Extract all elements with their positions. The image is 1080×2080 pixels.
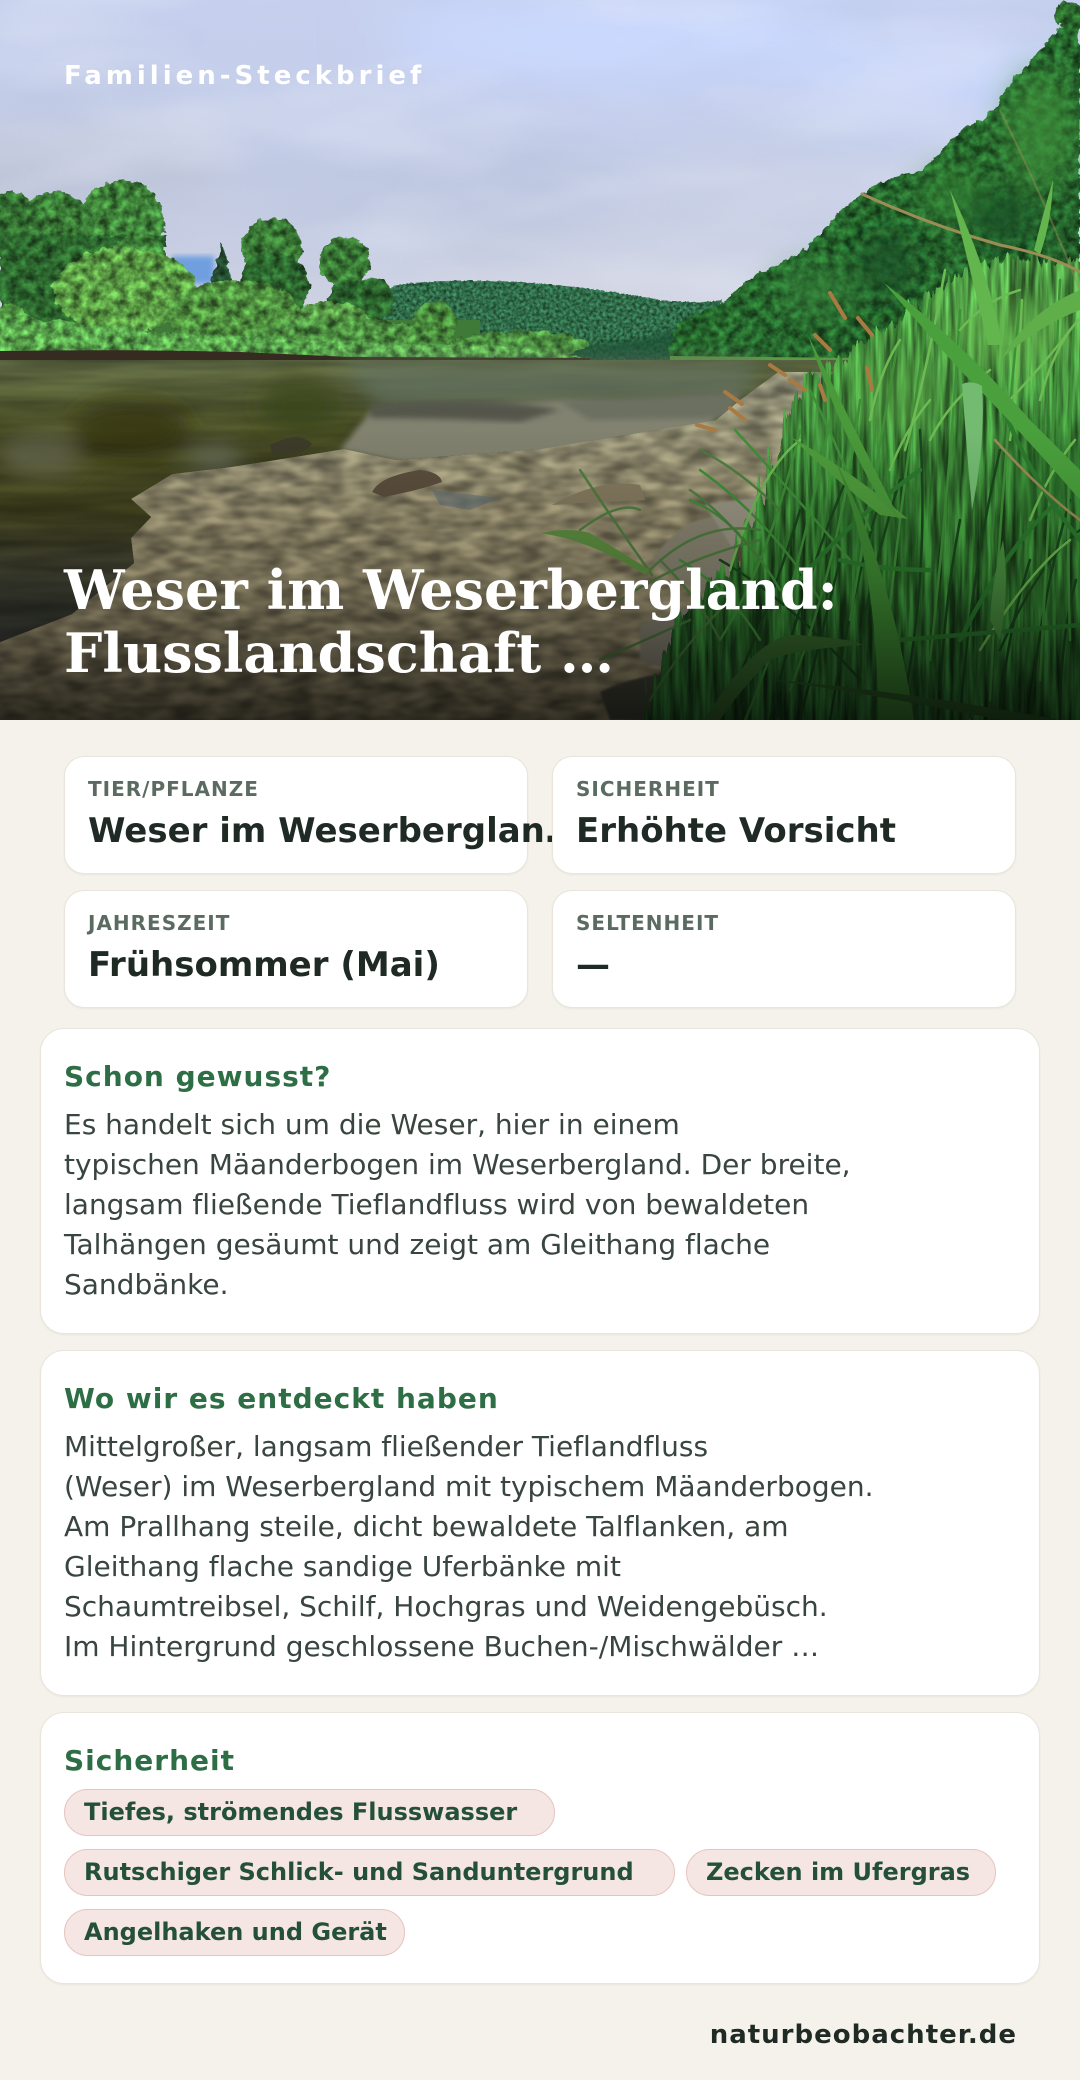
fact card: Sicherheit xyxy=(552,756,1016,874)
reeds and grass bank xyxy=(540,110,1080,730)
label: TIER/PFLANZE xyxy=(88,777,259,801)
chip: Rutschiger Schlick- und Sanduntergrund xyxy=(84,1858,634,1886)
body text xyxy=(64,1108,851,1301)
panel: Schon gewusst xyxy=(40,1028,1040,1334)
hero title: Flusslandschaft … xyxy=(64,621,614,685)
body text: Gleithang flache sandige Uferbänke mit xyxy=(64,1550,621,1583)
chip: Tiefes, strömendes Flusswasser xyxy=(84,1798,517,1826)
seed heads xyxy=(697,293,872,430)
fact card: Tier/Pflanze xyxy=(64,756,528,874)
fact card: Seltenheit xyxy=(552,890,1016,1008)
body text: Am Prallhang steile, dicht bewaldete Talflanken, am xyxy=(64,1510,789,1543)
hero kicker: Familien-Steckbrief xyxy=(64,61,425,91)
body text: (Weser) im Weserbergland mit typischem Mäanderbogen. xyxy=(64,1470,874,1503)
chip xyxy=(64,1849,675,1896)
body text: Schaumtreibsel, Schilf, Hochgras und Weidengebüsch. xyxy=(64,1590,828,1623)
body text: typischen Mäanderbogen im Weserbergland. Der breite, xyxy=(64,1148,851,1181)
value: Weser im Weserberglan… xyxy=(88,811,579,851)
chip xyxy=(64,1909,405,1956)
body text: Talhängen gesäumt und zeigt am Gleithang flache xyxy=(64,1228,770,1261)
heading: Schon gewusst? xyxy=(64,1060,331,1093)
left bank trees and bushes xyxy=(0,180,590,364)
heading: Sicherheit xyxy=(64,1744,235,1777)
body text: Mittelgroßer, langsam fließender Tieflandfluss xyxy=(64,1430,708,1463)
river water xyxy=(0,360,900,660)
chip xyxy=(64,1789,555,1836)
value: Frühsommer (Mai) xyxy=(88,945,440,985)
value: — xyxy=(576,945,610,985)
body text xyxy=(64,1430,874,1663)
panel: Wo wir es entdeckt haben xyxy=(40,1350,1040,1696)
label: JAHRESZEIT xyxy=(88,911,230,935)
heading: Wo wir es entdeckt haben xyxy=(64,1382,499,1415)
panel: Sicherheit xyxy=(40,1712,1040,1984)
fact card: Jahreszeit xyxy=(64,890,528,1008)
hero title xyxy=(64,558,838,685)
chip xyxy=(686,1849,996,1896)
bottom shade xyxy=(0,430,1080,720)
body text: Sandbänke. xyxy=(64,1268,228,1301)
hero title: Weser im Weserbergland: xyxy=(64,558,838,622)
hero photo: river landscape xyxy=(0,0,1080,720)
body text: langsam fließende Tieflandfluss wird von bewaldeten xyxy=(64,1188,809,1221)
label: SICHERHEIT xyxy=(576,777,720,801)
chip: Zecken im Ufergras xyxy=(706,1858,970,1886)
body text: Im Hintergrund geschlossene Buchen-/Mischwälder … xyxy=(64,1630,819,1663)
broad blades xyxy=(540,180,1080,720)
sandy river bed xyxy=(0,372,900,720)
body text: Es handelt sich um die Weser, hier in einem xyxy=(64,1108,680,1141)
value: Erhöhte Vorsicht xyxy=(576,811,896,851)
right wooded slope xyxy=(668,0,1080,376)
distant hill xyxy=(370,281,722,362)
sky xyxy=(0,0,1080,380)
label: SELTENHEIT xyxy=(576,911,719,935)
dry grass stems xyxy=(862,110,1080,520)
footer brand: naturbeobachter.de xyxy=(710,2020,1017,2050)
chip: Angelhaken und Gerät xyxy=(84,1918,387,1946)
